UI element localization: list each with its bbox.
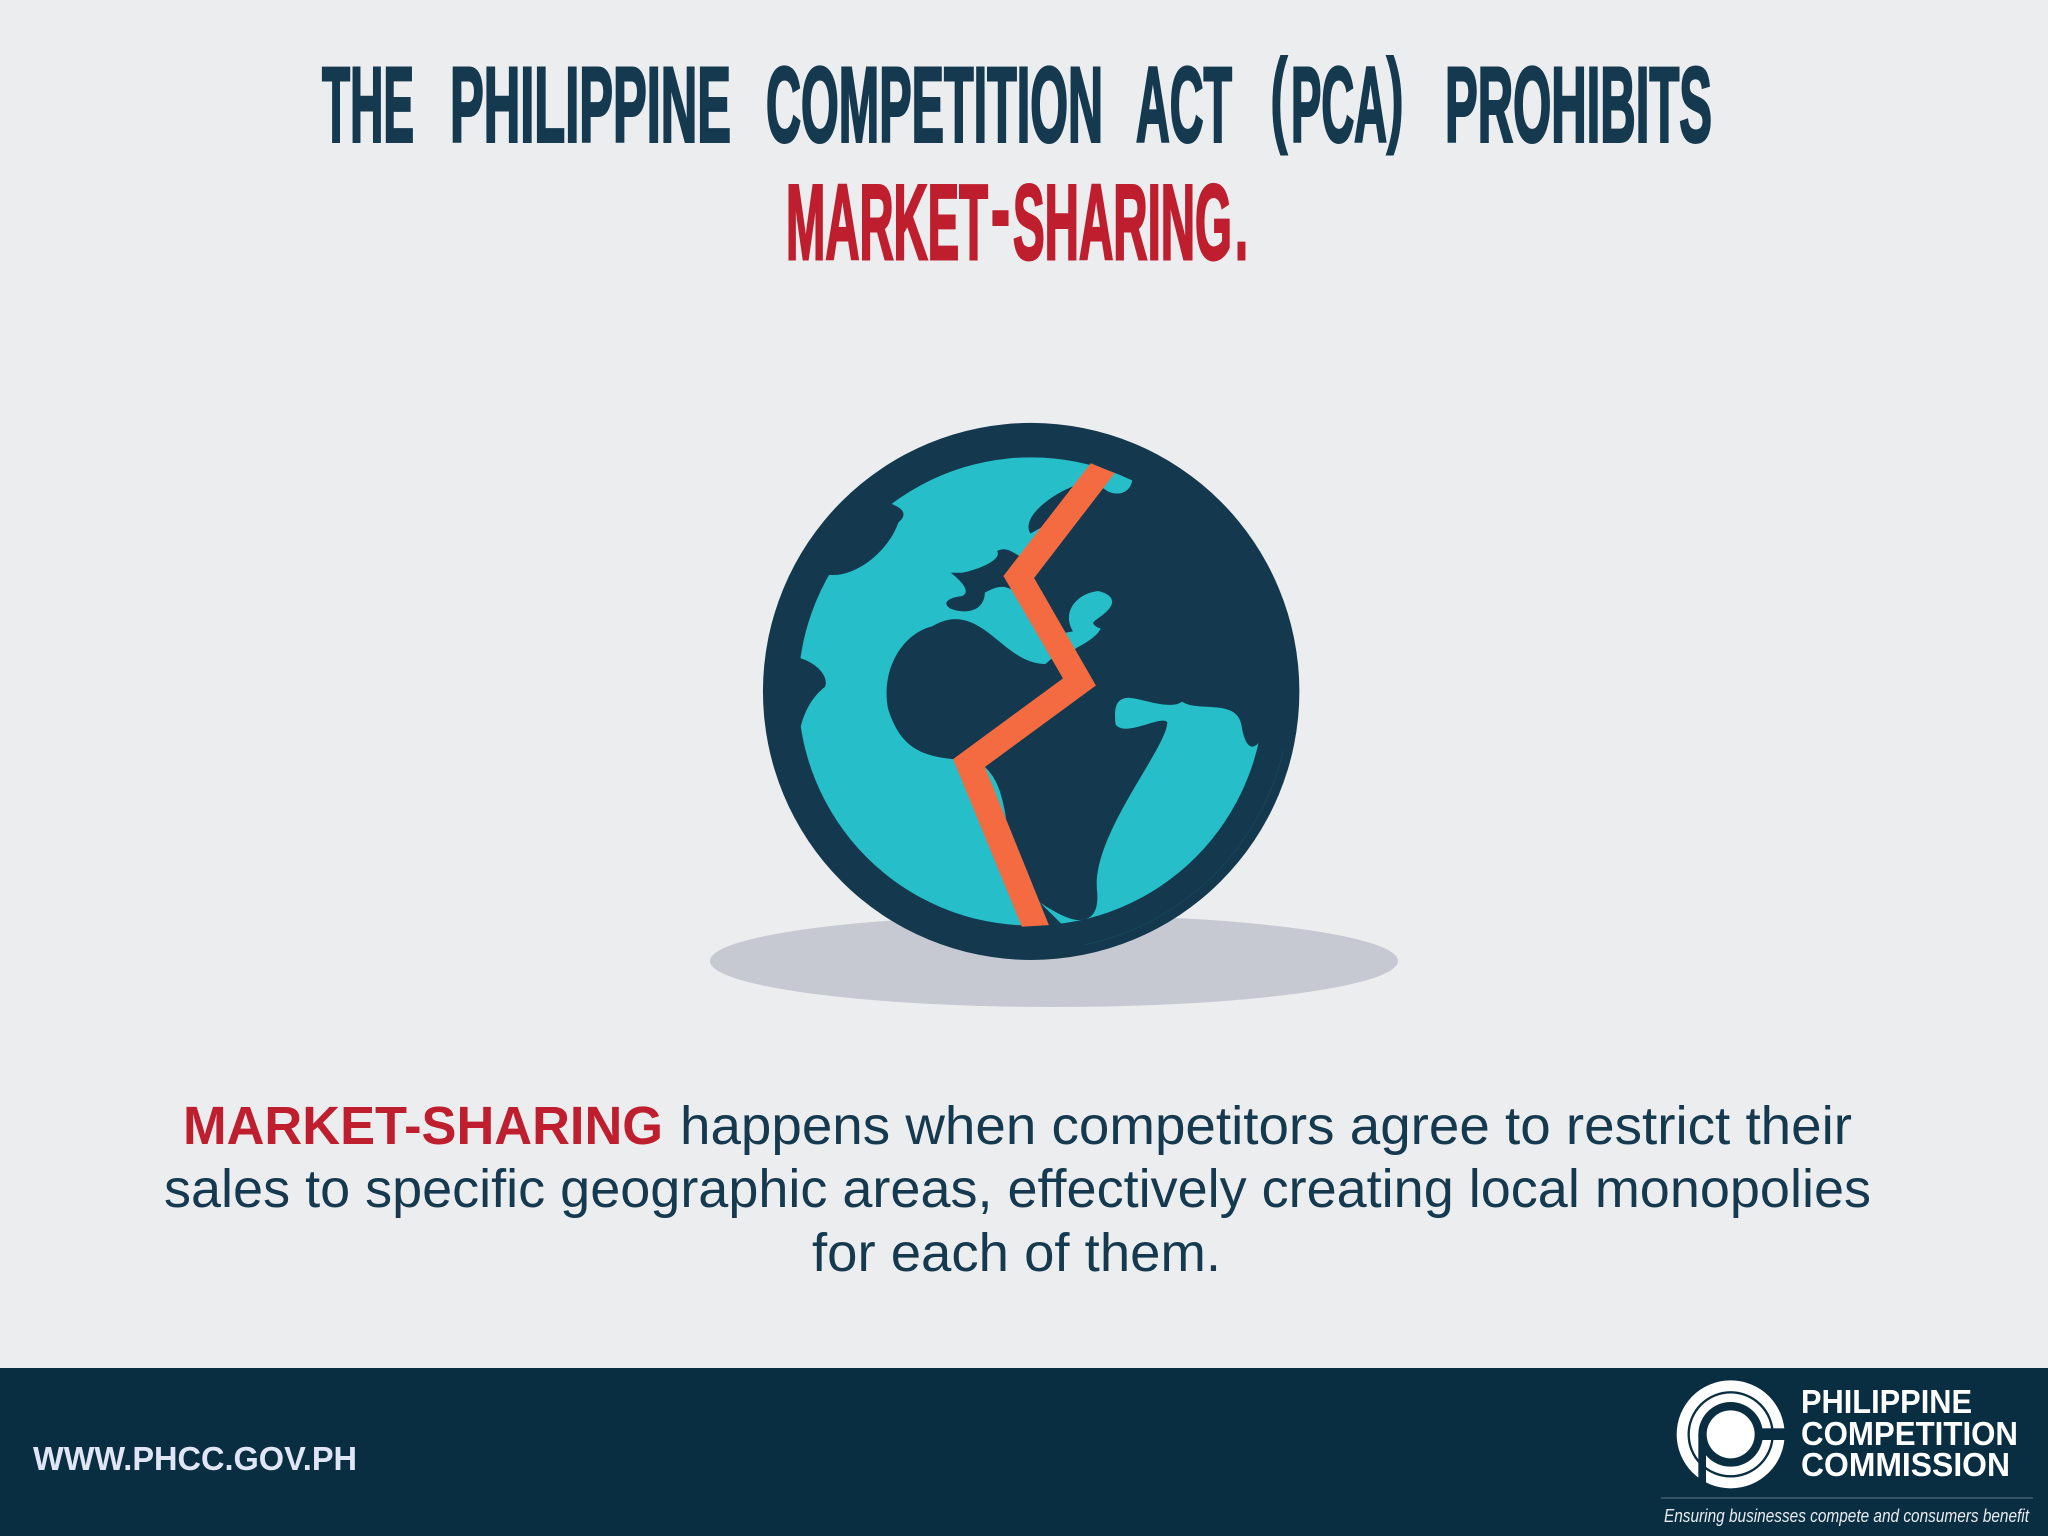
line 2: sales to specific geographic areas, effectively creating local monopolies [164, 1159, 1871, 1219]
line 3: for each of them. [812, 1223, 1221, 1283]
title line 2: MARKET [786, 162, 988, 282]
dark rim covering land overflow [799, 456, 1284, 946]
footer [0, 1368, 2048, 1536]
commission name: PHILIPPINE [1801, 1383, 1972, 1420]
commission name: COMPETITION [1801, 1415, 2018, 1452]
line 1: happens when competitors agree to restrict their [680, 1096, 1852, 1156]
description text [164, 1096, 1871, 1283]
text: PROHIBITS [1445, 44, 1712, 164]
title line 1: PHILIPPINE [450, 44, 731, 164]
market divide line [953, 463, 1115, 927]
title line 1: ACT [1136, 44, 1232, 164]
commission name: COMMISSION [1801, 1446, 2010, 1483]
title line 1: ( [1270, 36, 1288, 156]
title [322, 36, 1712, 282]
title line 1: PCA [1291, 44, 1387, 164]
title line 1 [322, 36, 1712, 164]
icon: commission logo [1677, 1380, 1787, 1493]
website url: WWW.PHCC.GOV.PH [33, 1440, 357, 1477]
icon: globe [762, 422, 1332, 961]
title line 1: THE [322, 44, 414, 164]
commission name [1801, 1383, 2018, 1483]
title line 1: COMPETITION [766, 44, 1103, 164]
title: . [1235, 162, 1248, 282]
title: SHARING [1013, 162, 1232, 282]
shadow under globe [710, 915, 1398, 1007]
keyword: MARKET-SHARING [183, 1096, 663, 1156]
title line 1: ) [1386, 36, 1404, 156]
title line 2: - [991, 149, 1010, 269]
